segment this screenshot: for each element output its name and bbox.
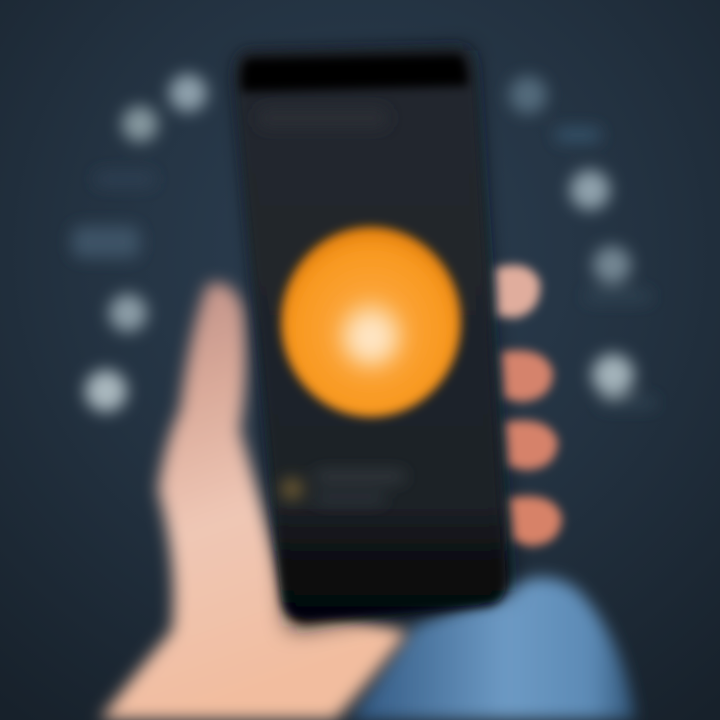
finger 1 xyxy=(496,265,540,318)
phone top bar xyxy=(241,54,468,92)
finger 2 xyxy=(502,351,553,402)
glow icon xyxy=(345,312,397,364)
phone body xyxy=(234,46,506,622)
floating app icons: right xyxy=(509,76,656,407)
finger 4 xyxy=(510,496,562,546)
floating app icons: left xyxy=(72,74,207,412)
screen header text placeholder xyxy=(258,108,388,128)
fingers on right edge xyxy=(496,265,562,546)
screen list row xyxy=(281,472,405,503)
phone shadow xyxy=(240,50,510,628)
orange circle xyxy=(281,227,461,417)
hand: palm and thumb xyxy=(100,283,408,720)
finger 3 xyxy=(506,421,558,470)
sleeve xyxy=(350,578,635,720)
phone xyxy=(234,46,510,628)
